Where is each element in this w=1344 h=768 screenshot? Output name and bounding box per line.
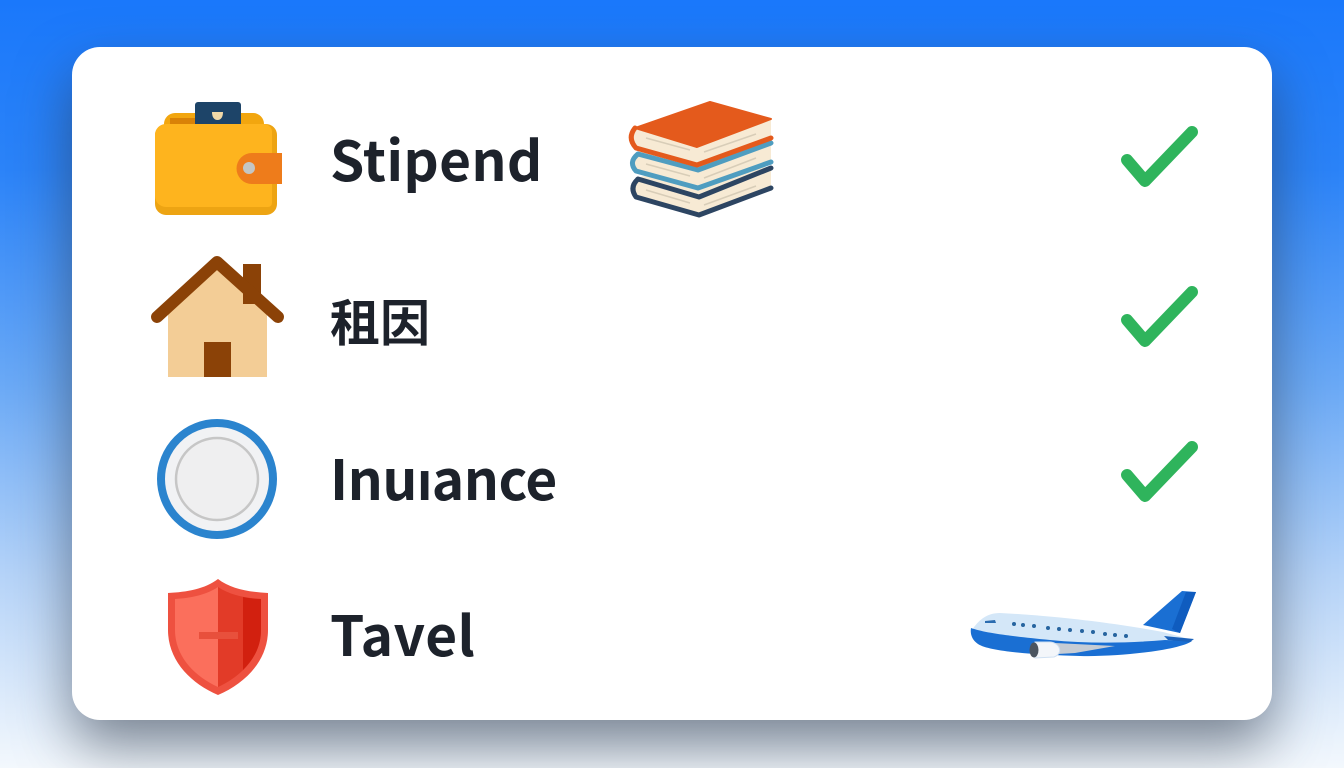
label: Stipend: Stipend: [330, 117, 543, 197]
label: Tavel: Tavel: [330, 592, 475, 672]
panel: benefits card: [72, 47, 1272, 720]
label: 租因: 租因: [330, 284, 430, 356]
label: Inuıance: Inuıance: [330, 436, 557, 516]
